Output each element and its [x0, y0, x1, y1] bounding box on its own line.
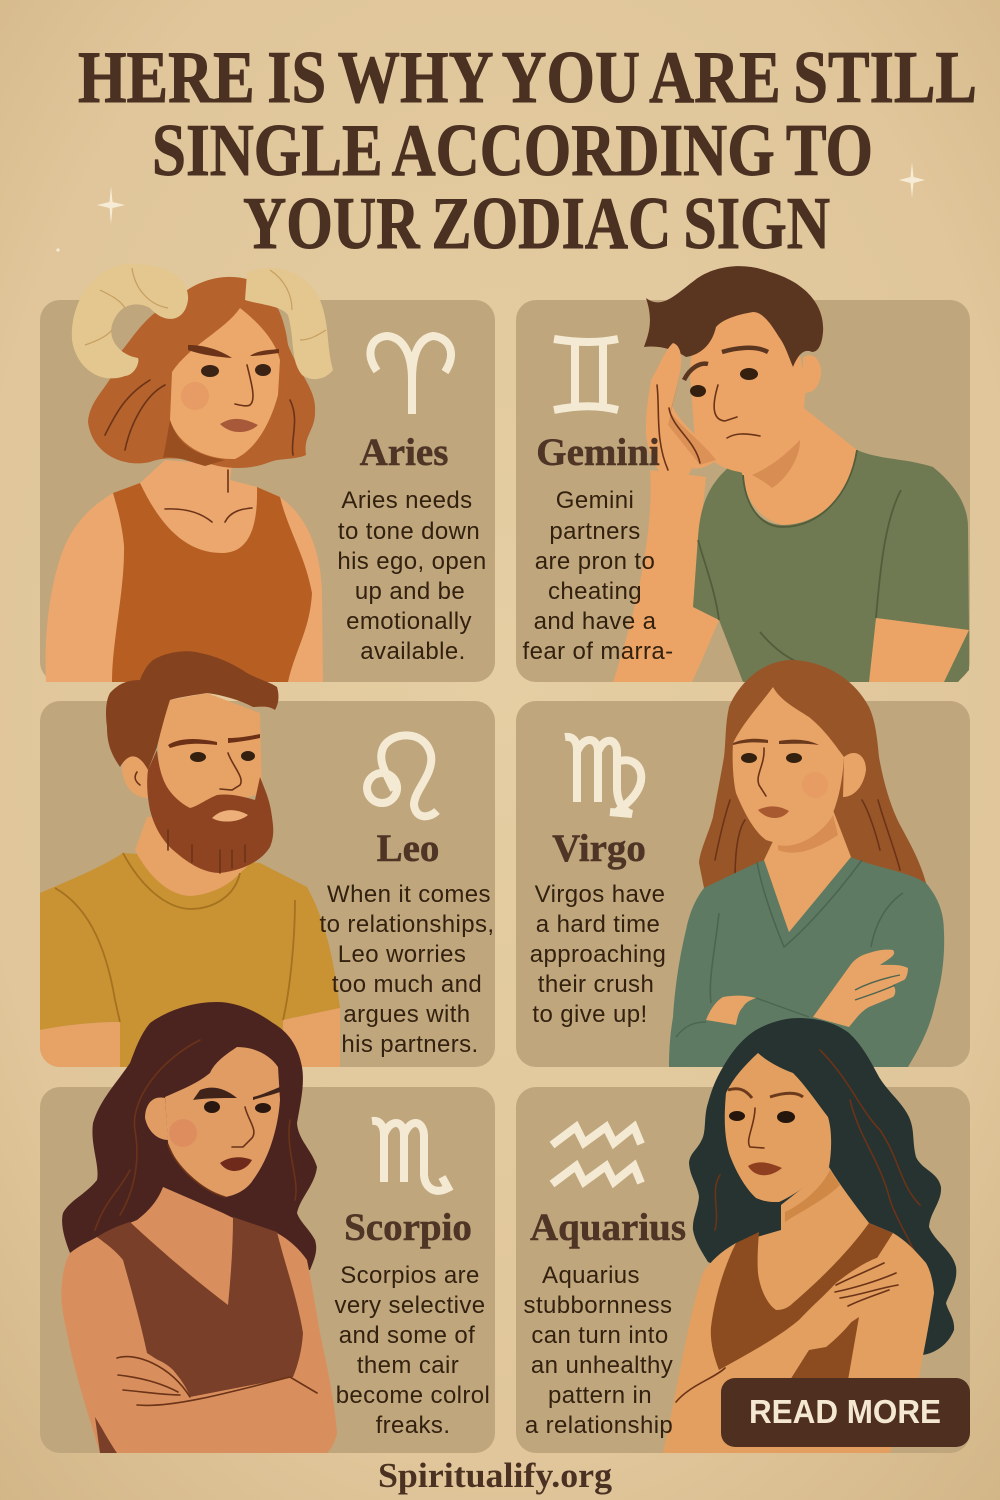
panel text: Scorpio: become colrol: [336, 1382, 490, 1409]
face: [733, 687, 844, 843]
panel text: Virgo: Virgos have: [535, 881, 665, 908]
figure: Leo man: [40, 651, 340, 1067]
panel text: Scorpio: very selective: [335, 1292, 485, 1319]
panel text: Leo: When it comes: [327, 881, 491, 908]
panel text: Scorpio: freaks.: [376, 1412, 450, 1439]
ear: [843, 753, 866, 797]
panel text: Aries: [337, 431, 487, 665]
button: read more: READ MORE: [749, 1393, 941, 1430]
panel text: Scorpio: Scorpio: [344, 1206, 472, 1249]
panel text: Virgo: a hard time: [536, 911, 660, 938]
panel text: Gemini: Gemini: [536, 431, 660, 474]
hand on head: [646, 343, 716, 484]
title: SINGLE ACCORDING TO: [152, 109, 873, 191]
panel text: Leo: argues with: [343, 1001, 471, 1028]
face: [158, 693, 262, 815]
neck: [764, 810, 851, 932]
panel text: Leo: Leo worries: [338, 941, 466, 968]
panel text: Leo: his partners.: [341, 1031, 479, 1058]
panel text: Aquarius: [524, 1206, 686, 1439]
hair: [106, 651, 278, 770]
ear: [122, 752, 148, 798]
title: [78, 36, 977, 264]
head: [690, 310, 806, 473]
body: [61, 1187, 337, 1453]
panel text: Aries: up and be: [355, 578, 465, 605]
hair: [88, 277, 315, 468]
panel text: Aries: to tone down: [338, 518, 480, 545]
panel text: Aquarius: stubbornness: [524, 1292, 672, 1319]
panel text: Gemini: and have a: [534, 608, 657, 635]
panel text: Scorpio: and some of: [339, 1322, 475, 1349]
panel text: Gemini: are pron to: [535, 548, 655, 575]
icon: Gemini glyph: [554, 339, 618, 410]
top: [711, 1223, 893, 1370]
panel text: Aquarius: can turn into: [531, 1322, 669, 1349]
icon: Virgo glyph: [565, 737, 641, 814]
shirt: [693, 450, 969, 682]
panel text: Scorpio: [335, 1206, 490, 1439]
panel text: Gemini: cheating: [548, 578, 642, 605]
panel text: Virgo: their crush: [538, 971, 654, 998]
hair: [689, 1018, 956, 1355]
panel text: Aries: Aries needs: [341, 487, 473, 514]
panel text: Aquarius: Aquarius: [530, 1206, 686, 1249]
figure: Gemini man: [613, 266, 969, 682]
panel text: Aries: available.: [360, 638, 466, 665]
hair: [62, 1002, 317, 1270]
beard: [147, 750, 273, 873]
body: [663, 1167, 934, 1453]
panel text: Aries: emotionally: [346, 608, 472, 635]
figure: Aquarius woman: [663, 1018, 956, 1453]
panel text: Virgo: Virgo: [552, 827, 646, 870]
icon: Scorpio glyph: [372, 1121, 448, 1191]
title: YOUR ZODIAC SIGN: [243, 182, 830, 264]
panel text: Virgo: approaching: [530, 941, 666, 968]
sweater: [669, 857, 944, 1067]
hair: [699, 660, 926, 888]
footer: site name: Spiritualify.org: [378, 1456, 613, 1495]
hands: [813, 950, 908, 1027]
hair: [644, 266, 823, 367]
figure: Scorpio woman: [61, 1002, 337, 1453]
panel text: Virgo: [530, 827, 666, 1028]
panel text: Scorpio: them cair: [357, 1352, 459, 1379]
icon: Leo glyph: [367, 735, 437, 816]
shirt: [40, 853, 340, 1067]
panel text: Aries: Aries: [360, 431, 448, 474]
title: HERE IS WHY YOU ARE STILL: [78, 36, 977, 118]
arms: [102, 1360, 192, 1453]
panel text: Scorpio: Scorpios are: [340, 1262, 480, 1289]
panel text: Gemini: partners: [549, 518, 641, 545]
icon: Aries glyph: [370, 336, 451, 414]
button: read more: [721, 1378, 970, 1447]
panel text: Leo: Leo: [377, 827, 439, 870]
panel text: Leo: too much and: [332, 971, 482, 998]
panel text: Gemini: fear of marra-: [523, 638, 673, 665]
face: [165, 1047, 280, 1197]
top: [97, 1217, 303, 1397]
arm and hand: [719, 1258, 878, 1370]
panel text: Gemini: [523, 431, 673, 665]
face: [725, 1053, 831, 1202]
panel text: Aquarius: an unhealthy: [531, 1352, 673, 1379]
figure: Aries woman with ram horns: [46, 264, 333, 682]
panel text: Leo: [320, 827, 494, 1058]
neck: [742, 405, 857, 525]
panel text: Virgo: to give up!: [532, 1001, 648, 1028]
icon: ram horns: [72, 264, 333, 379]
neck: [135, 816, 249, 896]
panel text: Gemini: Gemini: [556, 487, 634, 514]
panel text: Leo: to relationships,: [320, 911, 494, 938]
panels: [40, 300, 970, 1453]
panel text: Aries: his ego, open: [337, 548, 487, 575]
icon: Aquarius glyph: [552, 1127, 641, 1184]
skin: forearm and upper arm: [613, 470, 719, 682]
panel text: Aquarius: pattern in: [548, 1382, 652, 1409]
panel text: Aquarius: Aquarius: [542, 1262, 640, 1289]
figure: Virgo woman: [669, 660, 944, 1067]
sparkles: [56, 162, 949, 1150]
panel text: Aquarius: a relationship: [525, 1412, 673, 1439]
